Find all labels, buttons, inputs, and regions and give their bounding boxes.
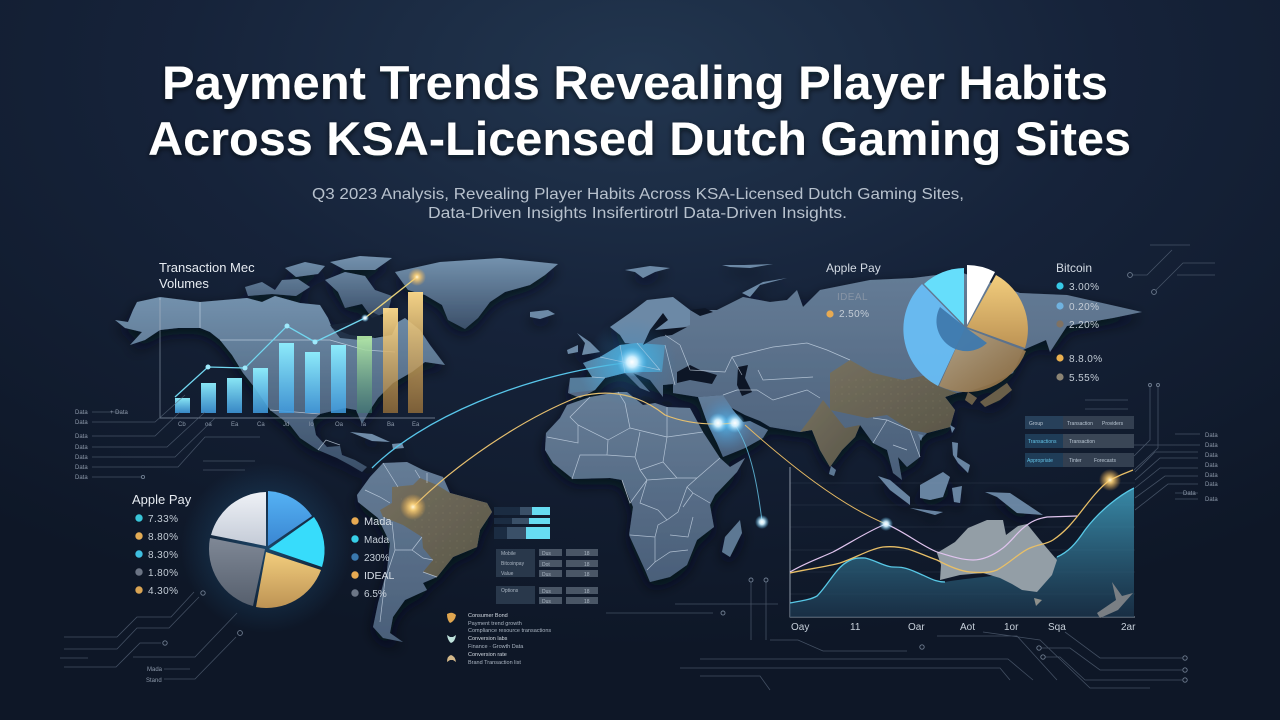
small data table: Dot	[542, 562, 550, 568]
title	[148, 56, 1131, 165]
right pie legend: IDEAL	[364, 570, 395, 582]
circuit lines: left: Data	[75, 445, 88, 451]
world map	[115, 256, 1142, 642]
circuit lines: left: Data	[75, 410, 88, 416]
chart x-axis labels: Oay	[791, 622, 809, 633]
right pie legend: 230%	[364, 553, 390, 564]
area series	[790, 488, 1134, 617]
chart x-axis labels	[791, 622, 1136, 633]
circuit lines: right: Data	[1205, 433, 1218, 439]
bars	[175, 292, 423, 413]
right pie legend	[351, 516, 395, 600]
chart x-axis labels: Sqa	[1048, 622, 1066, 633]
circuit lines: left: Data	[75, 465, 88, 471]
left pie legend: 4.30%	[148, 586, 178, 597]
key icon: teal	[447, 635, 456, 643]
China highlight	[830, 360, 957, 433]
top-right data table: Forecasts	[1094, 458, 1116, 464]
axis labels: oa	[205, 422, 212, 428]
gold series	[790, 470, 1133, 573]
small data table: 18	[584, 599, 590, 605]
small data table: 18	[584, 589, 590, 595]
key text: Payment trend growth	[468, 621, 522, 627]
small data table: Dus	[542, 599, 551, 605]
circuit lines: top right	[1085, 245, 1215, 470]
chart axes	[160, 300, 435, 418]
top-right data table: Group	[1029, 421, 1043, 427]
Bitcoin legend	[1056, 261, 1103, 384]
Madagascar	[722, 520, 742, 557]
circuit lines: right: Data	[1205, 443, 1218, 449]
left pie legend: Apple Pay	[132, 492, 192, 507]
area and line chart	[790, 467, 1136, 633]
top-right labels: IDEAL	[837, 292, 868, 303]
chart x-axis labels: 1or	[1004, 622, 1019, 633]
glowing map nodes	[400, 317, 769, 529]
Korea and Japan	[965, 383, 1012, 407]
small data table: Dus	[542, 589, 551, 595]
route arcs	[372, 362, 886, 524]
circuit lines: left: Data	[75, 420, 88, 426]
small data table: Options	[501, 588, 519, 594]
axis labels: Ia	[361, 422, 367, 428]
top-right data table: Transactions	[1028, 439, 1057, 445]
Bitcoin legend: 3.00%	[1069, 282, 1099, 293]
title: Payment Trends Revealing Player Habits	[162, 56, 1108, 109]
circuit lines: below Africa	[606, 578, 778, 640]
top-right data table: Transaction	[1069, 439, 1095, 445]
axis labels: Ea	[412, 422, 420, 428]
chart grid and axes	[790, 467, 1135, 617]
key text: Conversion rate	[468, 652, 507, 658]
top-right labels: Apple Pay	[826, 261, 881, 275]
top-right labels: 2.50%	[839, 309, 869, 320]
trend line	[175, 268, 426, 397]
left pie legend: 8.80%	[148, 532, 178, 543]
stacked progress bars	[494, 507, 550, 539]
chart x-axis labels: 11	[850, 622, 861, 633]
New Zealand	[1097, 582, 1133, 618]
axis labels: Ca	[257, 422, 265, 428]
top-right data table: Appropriate	[1027, 458, 1053, 464]
key text	[468, 613, 551, 666]
key text: Compliance resource transactions	[468, 628, 551, 634]
chart highlights	[879, 517, 893, 531]
key icon: sand	[447, 655, 456, 662]
left pie legend: 8.30%	[148, 550, 178, 561]
circuit lines: left: Data	[75, 455, 88, 461]
key text: Brand Transaction list	[468, 660, 521, 666]
chart heading: Transaction Mec	[159, 260, 255, 275]
Bitcoin legend: 8.8.0%	[1069, 354, 1103, 365]
title: Across KSA-Licensed Dutch Gaming Sites	[148, 112, 1131, 165]
top-right data table	[1025, 416, 1134, 467]
small data table: 18	[584, 572, 590, 578]
circuit lines: right	[1135, 433, 1218, 510]
Bitcoin legend: 2.20%	[1069, 320, 1099, 331]
North America	[115, 256, 445, 472]
Arabia	[698, 395, 768, 457]
circuit lines: left: + Data	[110, 410, 129, 416]
inland seas	[643, 308, 752, 396]
right pie legend: Mada	[364, 535, 389, 546]
bar chart: transaction volumes	[159, 260, 435, 428]
bottom-left pie chart	[181, 463, 351, 633]
chart x-axis labels: Aot	[960, 622, 975, 633]
circuit lines: right: Data	[1205, 482, 1218, 488]
right pie legend: 6.5%	[364, 589, 387, 600]
circuit lines: bottom left: Mada	[147, 667, 163, 673]
Tasmania	[1034, 598, 1042, 606]
left pie legend: 7.33%	[148, 514, 178, 525]
axis labels: Jd	[283, 422, 289, 428]
key text: Finance · Growth Data	[468, 644, 524, 650]
Western Europe highlight	[570, 343, 665, 393]
Brazil highlight	[380, 478, 492, 577]
circuit lines: right: Data	[1183, 491, 1196, 497]
small data table: Dus	[542, 572, 551, 578]
right pie legend: Mada	[364, 516, 392, 528]
axis labels	[178, 422, 420, 428]
small data table: Dus	[542, 551, 551, 557]
axis labels: Cb	[178, 422, 186, 428]
blue series	[790, 488, 1134, 603]
Arctic islands and UK	[530, 264, 787, 355]
subtitle	[312, 186, 964, 222]
top-right data table: Tinter	[1069, 458, 1082, 464]
axis labels: lo	[309, 422, 314, 428]
top-right data table: Transaction	[1067, 421, 1093, 427]
Bitcoin legend: 5.55%	[1069, 373, 1099, 384]
circuit lines: right: Data	[1205, 463, 1218, 469]
India highlight	[800, 400, 860, 467]
circuit lines: left	[75, 395, 260, 481]
circuit lines: left: Data	[75, 475, 88, 481]
circuit lines: right: Data	[1205, 453, 1218, 459]
left pie legend	[132, 492, 192, 597]
circuit lines: bottom left	[60, 591, 242, 684]
South America	[357, 462, 492, 642]
Africa	[545, 392, 745, 582]
small data table	[496, 549, 598, 605]
top-right data table: Providers	[1102, 421, 1124, 427]
chart x-axis labels: 2ar	[1121, 622, 1136, 633]
small data table: Mobile	[501, 551, 516, 557]
key text: Conversion labs	[468, 636, 508, 642]
circuit lines: right: Data	[1205, 497, 1218, 503]
small data table: 18	[584, 551, 590, 557]
circuit lines: bottom left: Stand	[146, 678, 162, 684]
small data table: 18	[584, 562, 590, 568]
Bitcoin legend: Bitcoin	[1056, 261, 1092, 275]
Caribbean islands	[350, 432, 404, 449]
Bitcoin legend: 0.20%	[1069, 302, 1099, 313]
map key with icons	[447, 613, 551, 666]
pink series	[790, 516, 1077, 572]
key text: Consumer Bond	[468, 613, 508, 619]
top-right labels	[826, 261, 881, 320]
Arabia highlight	[698, 395, 768, 457]
Scandinavia	[610, 297, 690, 345]
Southeast Asia islands	[878, 425, 1043, 515]
Sri Lanka	[829, 466, 836, 476]
axis labels: Ea	[231, 422, 239, 428]
Australia	[937, 520, 1057, 592]
circuit lines: right: Data	[1205, 473, 1218, 479]
subtitle: Data-Driven Insights Insifertirotrl Data-Driven Insights.	[428, 205, 847, 222]
Greenland	[395, 258, 558, 329]
small data table: Value	[501, 571, 514, 577]
circuit lines: bottom right	[680, 632, 1187, 690]
circuit lines: left: Data	[75, 434, 88, 440]
axis labels: Oa	[335, 422, 344, 428]
key icon: gold	[447, 613, 456, 623]
chart x-axis labels: Oar	[908, 622, 925, 633]
axis labels: Ba	[387, 422, 395, 428]
small data table: Bitcoinpay	[501, 561, 525, 567]
top-right pie chart	[903, 265, 1028, 392]
subtitle: Q3 2023 Analysis, Revealing Player Habits Across KSA-Licensed Dutch Gaming Sites,	[312, 186, 964, 203]
Eurasia	[568, 272, 1142, 480]
chart heading: Volumes	[159, 276, 209, 291]
left pie legend: 1.80%	[148, 568, 178, 579]
